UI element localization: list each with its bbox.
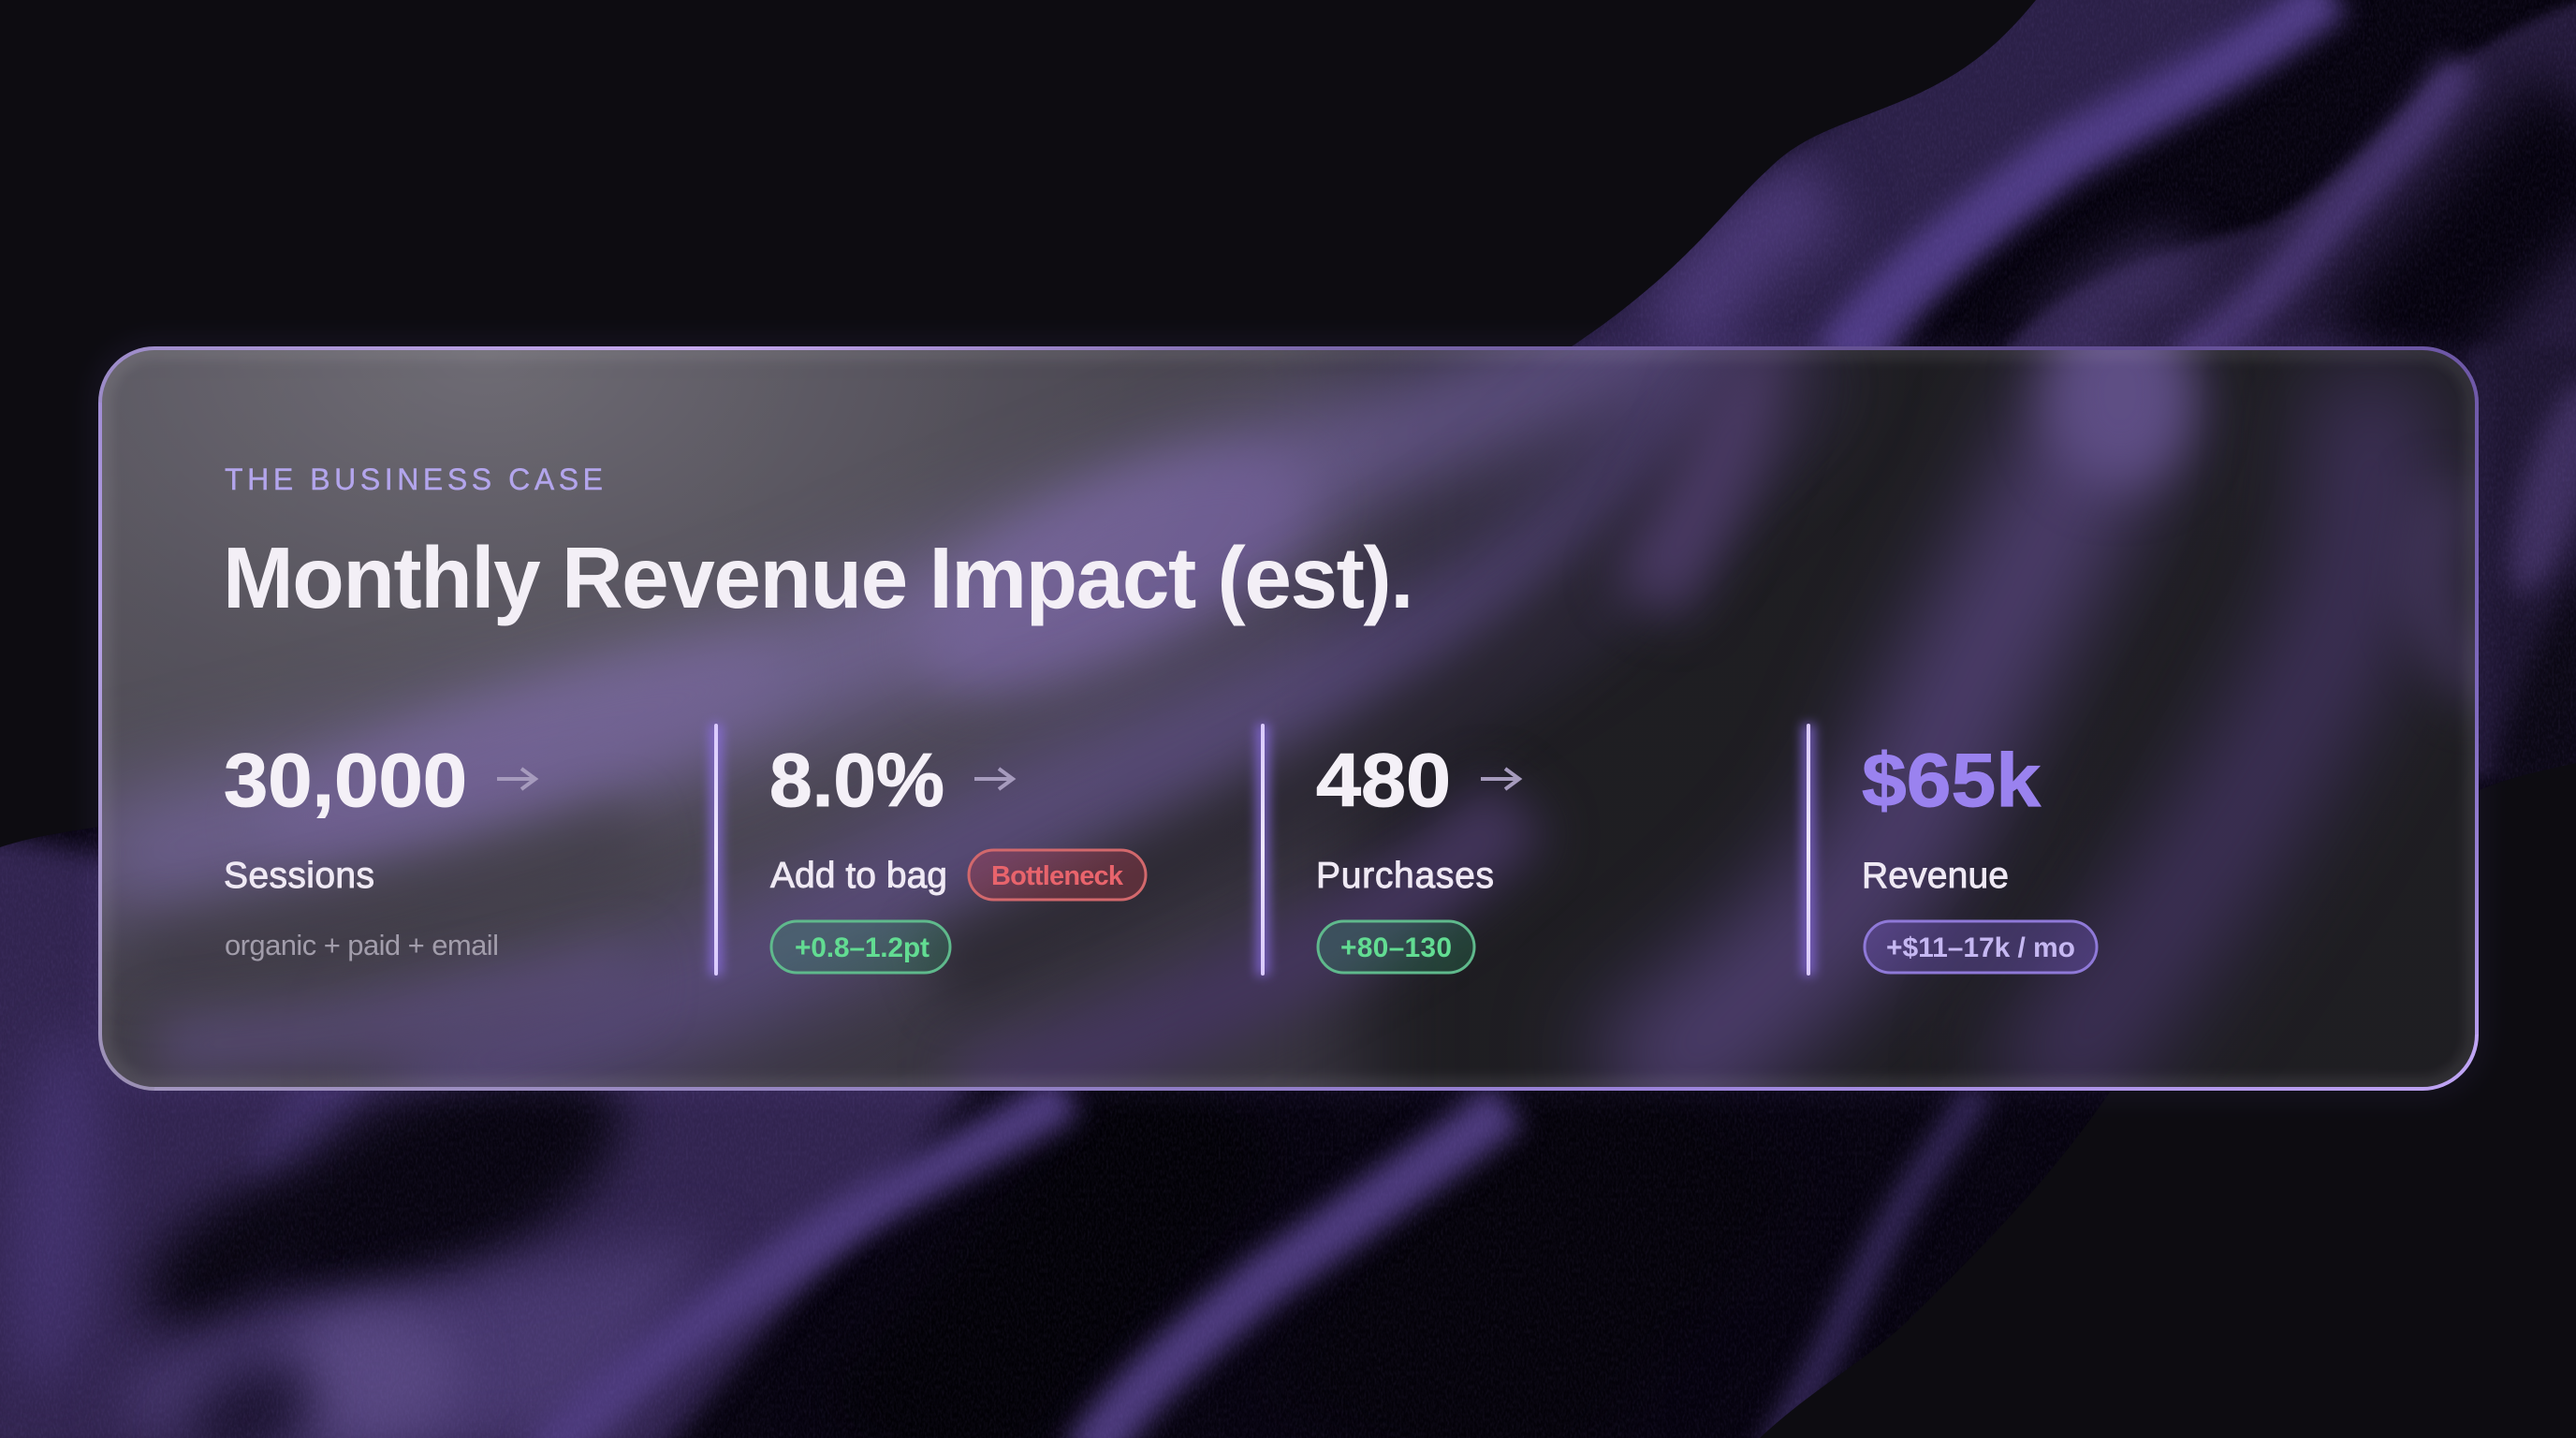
value: 8.0% bbox=[769, 739, 944, 823]
label: Purchases bbox=[1316, 856, 1494, 896]
inner bevel bbox=[100, 348, 2477, 1089]
label: Add to bag bbox=[770, 856, 947, 896]
uplift pill bbox=[1865, 921, 2097, 973]
second lit band bbox=[393, 337, 1778, 1086]
uplift pill: +80–130 bbox=[1340, 932, 1452, 963]
uplift pill: +0.8–1.2pt bbox=[795, 932, 929, 963]
panel outer glow bbox=[100, 348, 2477, 1089]
base tint left bbox=[102, 350, 1383, 1087]
divider 1 bbox=[710, 724, 723, 976]
uplift pill: +$11–17k / mo bbox=[1886, 932, 2075, 963]
divider 3 bbox=[1802, 724, 1815, 976]
metric: purchases bbox=[1316, 739, 1519, 973]
metric: revenue bbox=[1862, 739, 2097, 973]
metric: sessions bbox=[224, 739, 535, 961]
bottom streaks and lower left fold bbox=[159, 974, 637, 1049]
metric: add to bag bbox=[769, 739, 1146, 973]
uplift pill bbox=[1318, 921, 1474, 973]
bottleneck pill: Bottleneck bbox=[991, 861, 1124, 891]
title: Monthly Revenue Impact (est). bbox=[223, 529, 1412, 626]
eyebrow label: THE BUSINESS CASE bbox=[225, 462, 603, 496]
note: organic + paid + email bbox=[225, 929, 499, 961]
arrow bbox=[974, 769, 1013, 789]
frost overlay bbox=[94, 342, 2490, 1100]
panel: business case glass card bbox=[98, 346, 2479, 1091]
main diagonal highlight bbox=[84, 318, 1713, 871]
dark valleys between folds bbox=[889, 1095, 1217, 1438]
uplift pill bbox=[771, 921, 950, 973]
label: Sessions bbox=[224, 856, 374, 896]
label: Revenue bbox=[1862, 856, 2009, 896]
value: $65k bbox=[1862, 739, 2042, 823]
arrow bbox=[1481, 769, 1519, 789]
lit fold ridges bbox=[542, 1095, 1067, 1438]
right fold bands bbox=[1629, 374, 2125, 1100]
value: 30,000 bbox=[224, 739, 467, 823]
arrow bbox=[497, 769, 535, 789]
bottleneck pill bbox=[969, 850, 1146, 900]
panel edge stroke bbox=[100, 348, 2477, 1089]
value: 480 bbox=[1316, 739, 1451, 823]
divider 2 bbox=[1256, 724, 1269, 976]
panel interior with frosted fabric bbox=[102, 350, 2475, 1087]
valleys across the left side bbox=[131, 833, 637, 964]
